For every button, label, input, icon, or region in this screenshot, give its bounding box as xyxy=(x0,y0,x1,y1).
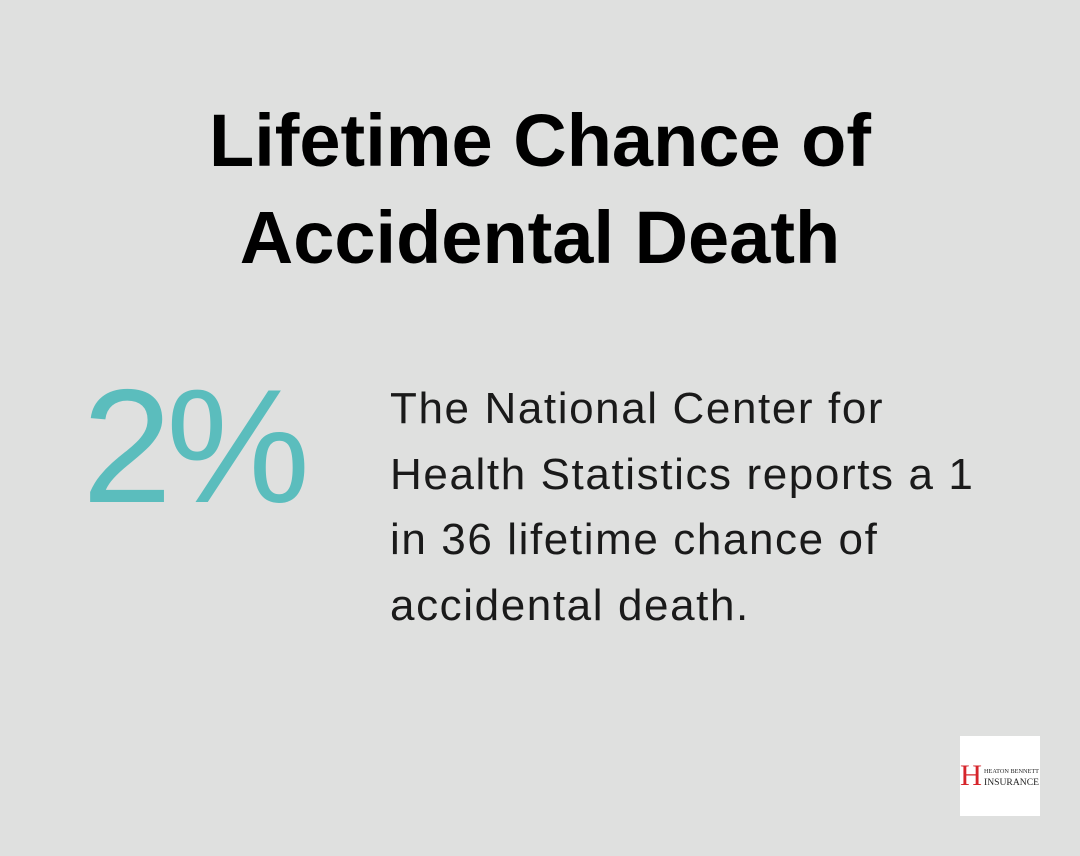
title: Lifetime Chance of xyxy=(209,99,871,182)
logo: Heaton Bennett Insurance: H xyxy=(960,759,982,792)
title: Accidental Death xyxy=(240,196,840,279)
text block: description: Health Statistics reports a 1 xyxy=(390,450,974,498)
stat: 2%: 2% xyxy=(82,356,304,537)
title xyxy=(209,99,872,279)
text block: description: accidental death. xyxy=(390,580,750,630)
text block: description: The National Center for xyxy=(390,384,884,433)
logo: Heaton Bennett Insurance: INSURANCE xyxy=(984,777,1040,787)
text block: description: in 36 lifetime chance of xyxy=(390,515,878,564)
logo: Heaton Bennett Insurance: HEATON BENNETT xyxy=(984,769,1039,775)
text block: description xyxy=(390,384,974,630)
logo: Heaton Bennett Insurance xyxy=(960,736,1040,816)
